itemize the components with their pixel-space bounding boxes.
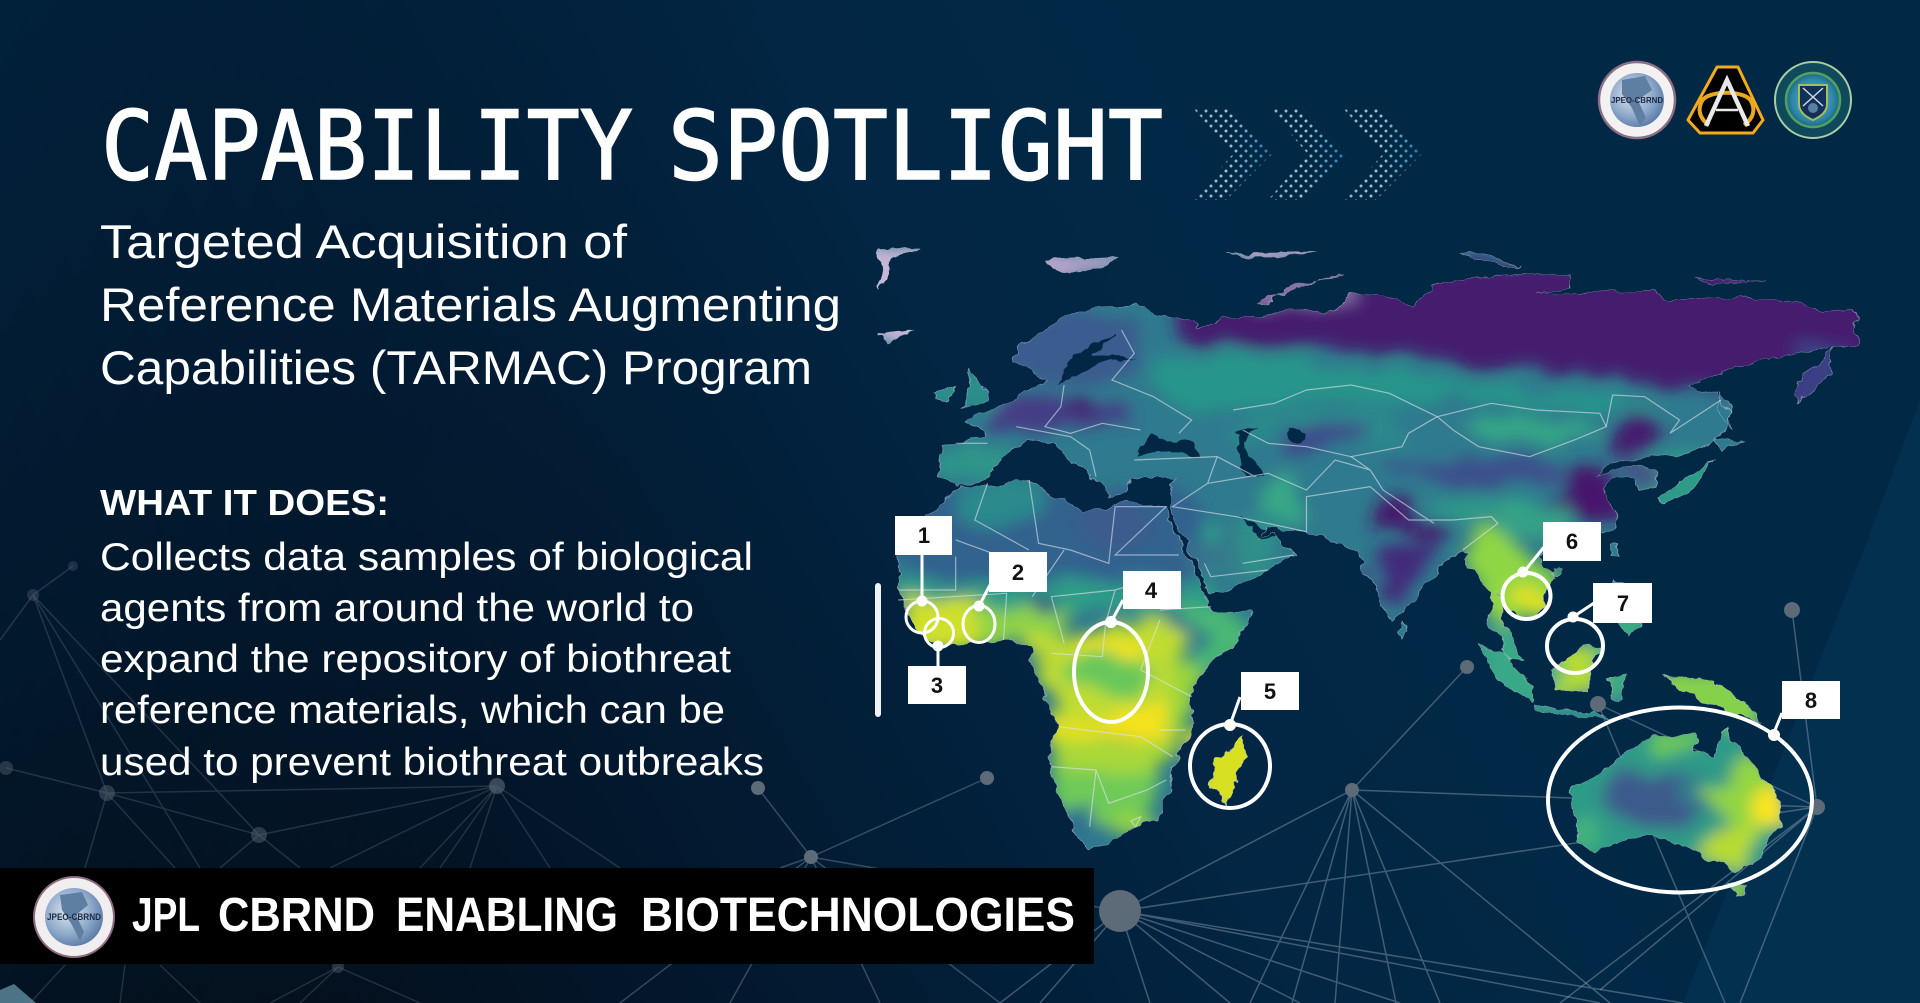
footer banner — [0, 868, 1094, 964]
logo: green and blue shield seal — [1775, 62, 1851, 138]
body text: expand the repository of biothreat — [100, 638, 731, 681]
icon: triple dotted chevrons — [1193, 108, 1422, 200]
logo: JPEO-CBRND seal: JPEO-CBRND — [1611, 95, 1663, 105]
network of nodes background — [0, 566, 1817, 1003]
callout 3 — [908, 618, 966, 704]
callout 2 — [963, 552, 1047, 642]
title: CAPABILITY — [101, 92, 633, 202]
stray white strip at map edge — [875, 583, 881, 717]
banner text: JPL — [132, 889, 200, 942]
callout 3: 3 — [931, 673, 943, 698]
title — [101, 92, 1163, 202]
heading: what it does: WHAT IT DOES: — [100, 482, 389, 523]
callout 6 — [1502, 522, 1601, 619]
banner text: BIOTECHNOLOGIES — [641, 889, 1075, 942]
subtitle: Reference Materials Augmenting — [100, 278, 841, 331]
subtitle: Targeted Acquisition of — [100, 215, 628, 268]
logos — [1599, 62, 1851, 138]
callout 7: 7 — [1617, 591, 1629, 616]
subtitle: Capabilities (TARMAC) Program — [100, 341, 812, 394]
banner logo: JPEO-CBRND — [47, 912, 101, 922]
coastlines — [879, 248, 1856, 896]
body text: agents from around the world to — [100, 587, 694, 630]
banner logo — [34, 877, 114, 957]
callout 5: 5 — [1264, 679, 1276, 704]
title: SPOTLIGHT — [668, 92, 1163, 202]
body text: Collects data samples of biological — [100, 536, 753, 579]
heat map colour field — [876, 247, 1860, 896]
callout 5 — [1190, 672, 1299, 808]
callout 1: 1 — [918, 523, 930, 548]
body text: reference materials, which can be — [100, 689, 725, 732]
callout 7 — [1547, 583, 1652, 673]
callout 4: 4 — [1145, 578, 1158, 603]
banner text — [132, 889, 1075, 942]
callout 2: 2 — [1012, 560, 1024, 585]
country borders — [898, 330, 1721, 827]
callout 6: 6 — [1566, 529, 1578, 554]
subtitle — [100, 215, 841, 394]
callouts — [895, 516, 1840, 892]
body text: used to prevent biothreat outbreaks — [100, 741, 764, 784]
world map heat map — [876, 247, 1860, 896]
callout 8: 8 — [1805, 688, 1817, 713]
banner text: ENABLING — [396, 889, 618, 942]
logo: JPEO-CBRND seal — [1599, 62, 1675, 138]
logo: army acquisition omega — [1688, 67, 1763, 133]
callout 8 — [1548, 681, 1840, 892]
banner text: CBRND — [218, 889, 375, 942]
callout 4 — [1074, 571, 1181, 722]
callout 1 — [895, 516, 952, 633]
body text — [100, 536, 764, 784]
